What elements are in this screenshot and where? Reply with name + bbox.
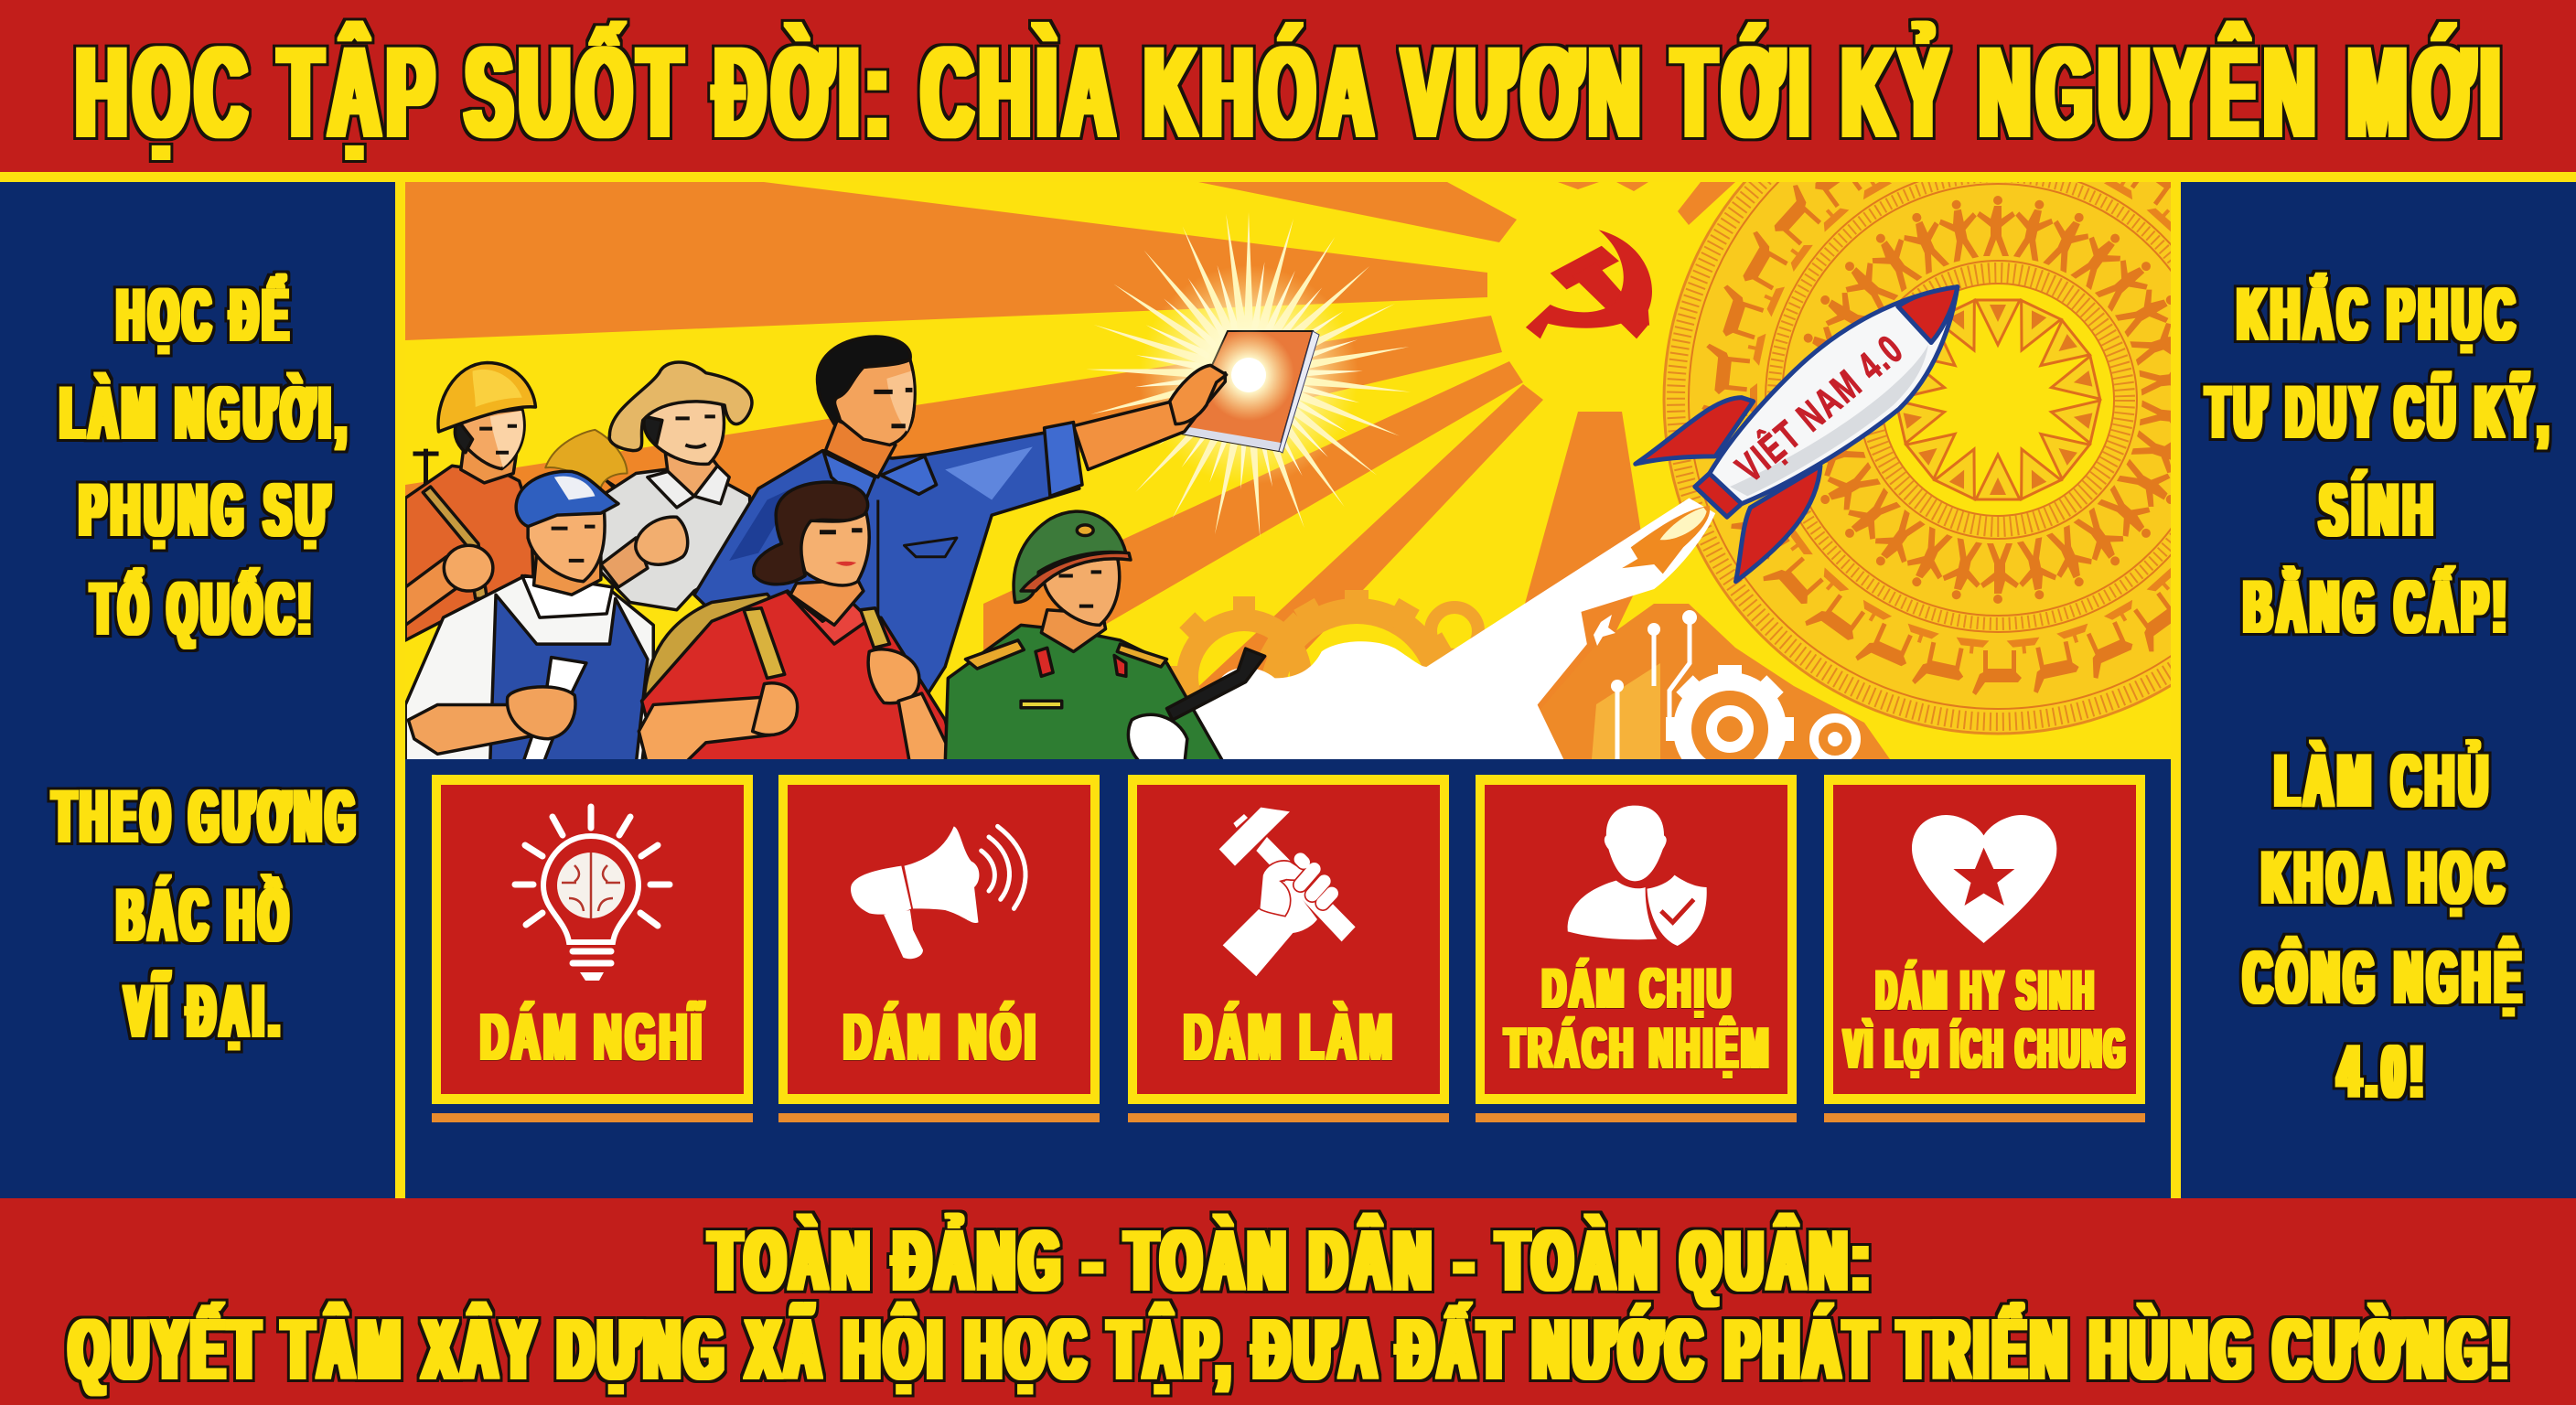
label: DÁM NÓI [843,1002,1039,1074]
slogan: study to be human: TỔ QUỐC! [91,567,316,650]
rocket nose cone [1898,287,1958,342]
drum figures inner band [1804,196,2171,604]
panel: left slogans: THEO GƯƠNG [53,776,360,858]
panel: right slogans [2171,182,2576,1198]
slogan: master science and technology: 4.0! [2338,1031,2429,1113]
title banner [0,0,2576,182]
book [1181,329,1319,453]
glowing sunburst [1086,212,1411,538]
icon: person with shield [1568,806,1707,946]
figure: leader raising the book [694,337,1227,713]
card: dare to sacrifice: VÌ LỢI ÍCH CHUNG [1844,1018,2128,1079]
card: dare to think [432,775,753,1122]
gears and circuit board [1171,590,1890,759]
icon: heart with star [1912,815,2056,943]
sun rays [405,182,1735,759]
rocket exhaust cloud [1164,498,1715,766]
hammer and sickle [1526,230,1652,338]
icon: megaphone [851,826,1025,959]
slogan: follow Uncle Ho [53,776,360,1053]
slogan: study to be human: HỌC ĐỂ [117,273,293,357]
label: TRÁCH NHIỆM [1505,1017,1772,1080]
hero illustration [405,182,2171,759]
card: dare to take responsibility [1476,775,1797,1122]
rocket fins [1636,398,1820,582]
slogan: follow Uncle Ho: BÁC HỒ [117,874,293,957]
figures group [405,337,1265,766]
rocket label: VIỆT NAM 4.0 [1727,326,1912,491]
slogan: study to be human: PHỤNG SỰ [80,469,334,552]
slogan: study to be human [60,273,351,650]
label: DÁM CHỊU [1542,958,1734,1019]
panel: five dare pillars [405,759,2171,1198]
panel: left slogans [0,182,405,1198]
label [1505,958,1772,1080]
slogan: study to be human: LÀM NGƯỜI, [60,371,351,455]
icon: light bulb with brain [515,807,670,981]
label: DÁM NGHĨ [480,1002,705,1074]
slogan: overcome old thinking: SÍNH [2320,468,2438,552]
label: DÁM LÀM [1184,1002,1396,1074]
drum figures outer band [1701,182,2171,695]
label [1844,960,2128,1079]
slogan: master science and technology [2244,739,2526,1113]
Dong Son bronze drum [1663,182,2171,735]
slogan: overcome old thinking [2206,273,2553,649]
icon: hand gripping hammer [1219,808,1356,976]
slogan: follow Uncle Ho: VĨ ĐẠI. [125,970,284,1053]
drum central star [1895,300,2100,499]
card: dare to act [1128,775,1449,1122]
rocket Việt Nam 4.0 [1636,287,1958,582]
rocket body [1710,287,1958,504]
figure: worker with apron and blue cap [405,471,653,766]
figure: farmer with straw hat and rice [545,362,753,610]
card: dare to sacrifice [1824,775,2145,1122]
bottom banner [0,1198,2576,1405]
label: DÁM HY SINH [1876,960,2097,1021]
card: dare to speak [778,775,1100,1122]
figure: construction worker with hard hat [405,362,535,640]
figure: soldier with rifle [945,511,1265,766]
figure: woman with backpack [639,482,957,766]
rocket flame [1622,506,1710,574]
